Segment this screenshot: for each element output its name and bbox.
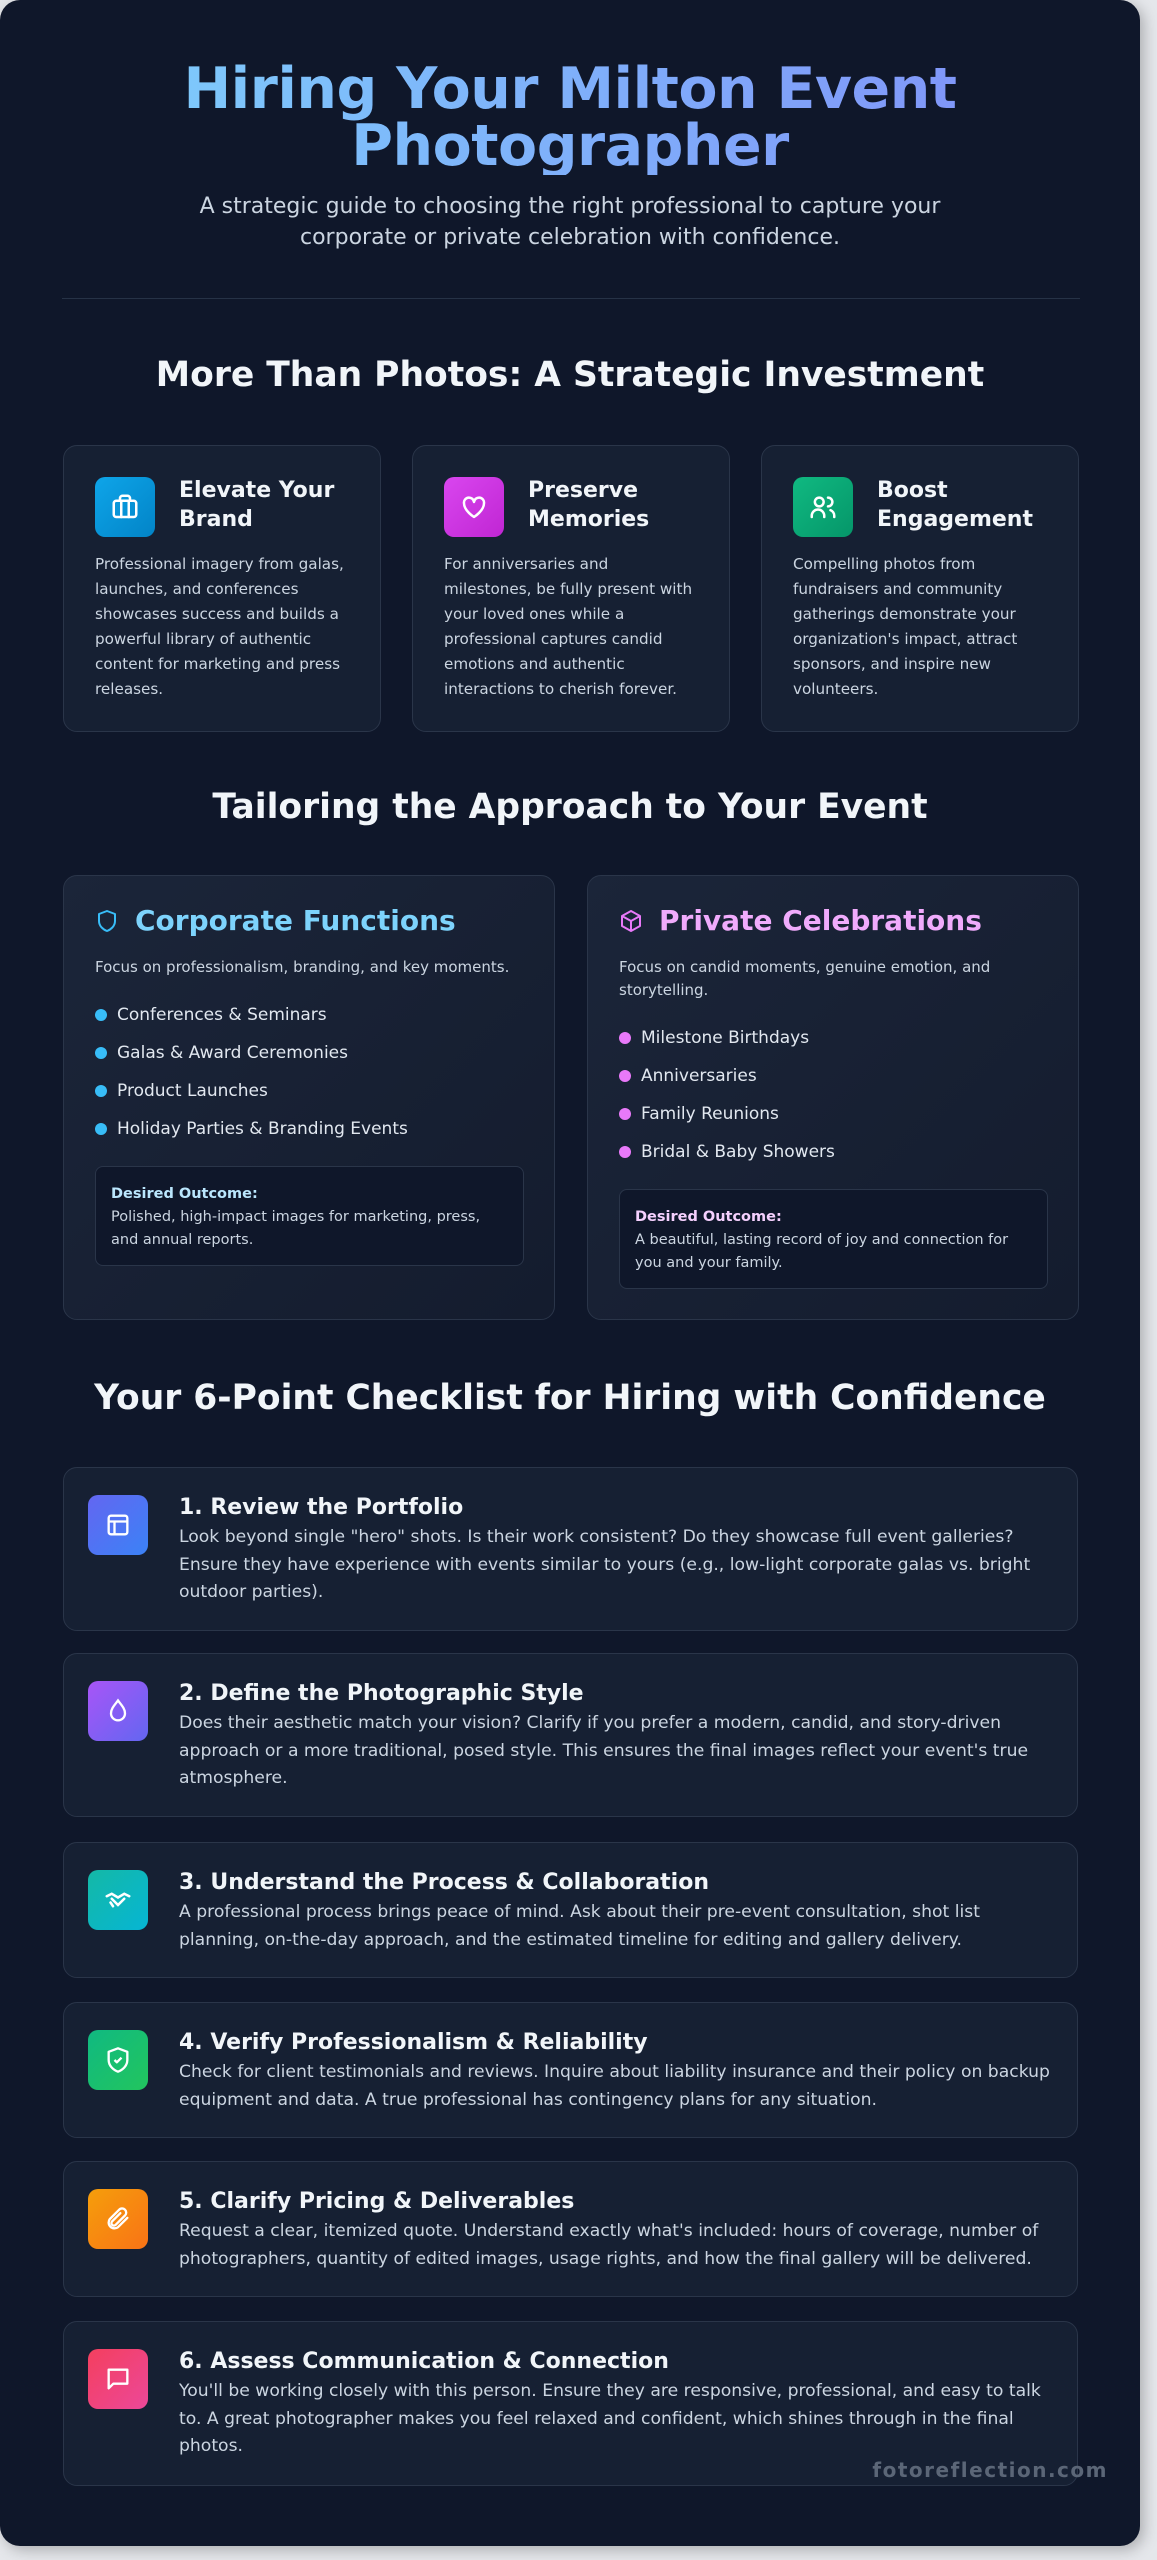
item text: 1. Review the Portfolio xyxy=(179,1495,463,1520)
desired outcome: Desired Outcome: xyxy=(635,1209,782,1225)
footer brand: fotoreflection.com xyxy=(872,2458,1108,2482)
panel title: Private Celebrations xyxy=(659,904,982,937)
card text: Professional imagery from galas, launches, and conferences showcases success and builds a powerful library of authentic content for marketing and press releases. xyxy=(95,555,344,698)
item text: Check for client testimonials and reviews. Inquire about liability insurance and their policy on backup equipment and data. A true professional has contingency plans for any situation. xyxy=(179,2062,1050,2110)
item text: You'll be working closely with this person. Ensure they are responsive, professional, and easy to talk to. A great photographer makes you feel relaxed and confident, which shines through in the final photos. xyxy=(179,2381,1041,2456)
checklist item 2 xyxy=(63,1653,1078,1817)
subtitle: A strategic guide to choosing the right professional to capture your corporate or private celebration with confidence. xyxy=(200,194,940,250)
panel: corporate xyxy=(63,875,555,1320)
heading: strategic investment: More Than Photos: A Strategic Investment xyxy=(156,355,984,395)
item text: Request a clear, itemized quote. Understand exactly what's included: hours of coverage, number of photographers, quantity of edited images, usage rights, and how the final gallery will be delivered. xyxy=(179,2221,1038,2268)
icon: briefcase xyxy=(95,477,155,537)
icon: shield check xyxy=(88,2030,148,2090)
desired outcome: Polished, high-impact images for marketing, press, and annual reports. xyxy=(111,1209,480,1248)
item text: 5. Clarify Pricing & Deliverables xyxy=(179,2189,574,2214)
card title xyxy=(528,478,649,532)
bullet list: Milestone Birthdays xyxy=(641,1028,809,1048)
card title: Engagement xyxy=(877,507,1033,532)
card title xyxy=(179,478,334,532)
icon: users xyxy=(793,477,853,537)
card text: For anniversaries and xyxy=(444,555,608,573)
card text: milestones, be fully present with your loved ones while a professional captures candid emotions and authentic interactions to cherish forever. xyxy=(444,580,692,698)
card title: Preserve xyxy=(528,478,638,503)
checklist item 4 xyxy=(63,2002,1078,2138)
checklist item 5 xyxy=(63,2161,1078,2297)
heading: checklist: Your 6-Point Checklist for Hiring with Confidence xyxy=(94,1378,1046,1418)
card: preserve memories xyxy=(412,445,730,732)
bullet list xyxy=(619,1028,835,1162)
icon: layout xyxy=(88,1495,148,1555)
card title: Boost xyxy=(877,478,948,503)
icon: handshake xyxy=(88,1870,148,1930)
item text: 4. Verify Professionalism & Reliability xyxy=(179,2030,648,2055)
item text xyxy=(179,1870,980,1950)
checklist item 3 xyxy=(63,1842,1078,1978)
item text: 2. Define the Photographic Style xyxy=(179,1681,584,1706)
bullet list: Bridal & Baby Showers xyxy=(641,1142,835,1162)
item text: 3. Understand the Process & Collaboration xyxy=(179,1870,709,1895)
card title: Elevate Your xyxy=(179,478,334,503)
icon: heart xyxy=(444,477,504,537)
title: Photographer xyxy=(351,113,789,179)
bullet list: Product Launches xyxy=(117,1081,268,1101)
desired outcome xyxy=(95,1166,524,1266)
bullet list: Holiday Parties & Branding Events xyxy=(117,1119,408,1139)
item text xyxy=(179,2030,1050,2110)
bullet list: Anniversaries xyxy=(641,1066,757,1086)
icon: drop xyxy=(88,1681,148,1741)
item text: Look beyond single "hero" shots. Is their work consistent? Do they showcase full event galleries? Ensure they have experience with events similar to yours (e.g., low-light corporate galas vs. bright outdoor parties). xyxy=(179,1527,1030,1602)
card title: Memories xyxy=(528,507,649,532)
icon: chat xyxy=(88,2349,148,2409)
card title: Brand xyxy=(179,507,253,532)
desired outcome: A beautiful, lasting record of joy and connection for you and your family. xyxy=(635,1232,1008,1271)
focus text: Focus on professionalism, branding, and key moments. xyxy=(95,958,509,976)
card: elevate brand xyxy=(63,445,381,732)
title xyxy=(0,61,1140,175)
focus text: Focus on candid moments, genuine emotion, and storytelling. xyxy=(619,958,990,999)
card title xyxy=(877,478,1033,532)
desired outcome xyxy=(619,1189,1048,1289)
item text xyxy=(179,2189,1039,2268)
checklist item 1 xyxy=(63,1467,1078,1631)
title: Hiring Your Milton Event xyxy=(183,56,957,122)
item text: A professional process brings peace of mind. Ask about their pre-event consultation, shot list planning, on-the-day approach, and the estimated timeline for editing and gallery delivery. xyxy=(179,1902,980,1950)
panel title: Corporate Functions xyxy=(135,904,456,937)
bullet list: Galas & Award Ceremonies xyxy=(117,1043,348,1063)
icon: paperclip xyxy=(88,2189,148,2249)
bullet list xyxy=(95,1005,408,1139)
card text: Compelling photos from fundraisers and community gatherings demonstrate your organization's impact, attract sponsors, and inspire new volunteers. xyxy=(793,555,1017,698)
item text: Does their aesthetic match your vision? Clarify if you prefer a modern, candid, and story-driven approach or a more traditional, posed style. This ensures the final images reflect your event's true atmosphere. xyxy=(179,1713,1028,1788)
item text: 6. Assess Communication & Connection xyxy=(179,2349,669,2374)
bullet list: Conferences & Seminars xyxy=(117,1005,327,1025)
bullet list: Family Reunions xyxy=(641,1104,779,1124)
card: boost engagement xyxy=(761,445,1079,732)
panel: private xyxy=(587,875,1079,1320)
heading: tailoring: Tailoring the Approach to Your Event xyxy=(212,787,928,827)
desired outcome: Desired Outcome: xyxy=(111,1186,258,1202)
checklist item 6 xyxy=(63,2321,1078,2486)
